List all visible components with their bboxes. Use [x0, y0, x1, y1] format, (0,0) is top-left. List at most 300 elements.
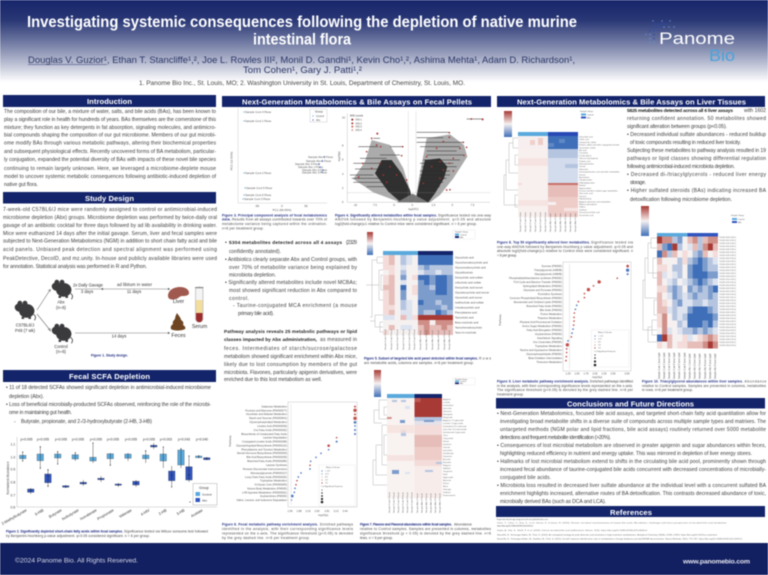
legend: sample group: Abx: [738, 221, 741, 224]
text block: fecal pathway analysis: classes impacted by Abx administration,: [224, 337, 318, 343]
text block: conclusions: detections and frequent metabolite identification (>20%).: [500, 435, 611, 441]
caption: figure 4: log2(fold-change)≥1 relative to Control mice were considered significant. n = 6 per group.: [335, 222, 477, 226]
pathway labels: Phenylalanine and Tyrosine Metabolism: [241, 448, 287, 452]
authors: Douglas V. Guzior¹, Ethan T. Stancliffe¹,², Joe L. Rowles III², Monil D. Gandhi¹, Kevin Cho¹,², Ashima Mehta¹, Adam D. Richardson¹,: [28, 55, 575, 65]
column labels: Sample Abx 5 Fecal: [434, 493, 437, 513]
legend: group: Control: [316, 115, 325, 118]
pathway labels: Sucrose (PW000): [542, 264, 562, 268]
outlier dots: [22, 442, 207, 502]
row labels: Tricin: [443, 435, 448, 437]
row labels: Rutin: [443, 473, 448, 476]
column labels: Sample Cont 5 Liver Lipid: [678, 352, 681, 379]
caption: figure 9: [497, 380, 634, 396]
text block: fecal pathway analysis: Pathway analysis reveals 25 metabolic pathways or lipid: [224, 329, 357, 335]
text block: conclusions: • Microbiota loss resulted in decreased liver sulfate abundance at the individual level with a concurrent sulfated BA: [497, 483, 767, 489]
row labels: Genistein: [443, 410, 451, 413]
significance labels: p=0.040: [196, 438, 208, 442]
column labels: Sample Cont 2 Fecal: [390, 329, 393, 350]
figure 5: bile acid heatmap: [366, 230, 489, 350]
row labels: TG(14:0/16:1/18:1): [719, 291, 736, 293]
text block: fecal pathway analysis: microbiota. Flavones, particularly apigenin derivatives, were: [224, 370, 357, 376]
pathway labels: Pentose Glucuronate Interconversions: [243, 467, 288, 471]
diagram labels: Abx: [57, 300, 66, 304]
legend: MSI levels: MSI-1: [356, 120, 363, 122]
caption: figure 6: identified in the analysis, with their corresponding significance levels: [222, 527, 353, 531]
row labels: Formononetin: [443, 494, 455, 497]
row labels: Myricetin: [443, 479, 451, 482]
caption: figure 10: [642, 380, 767, 392]
row labels: TG(18:1/18:1/18:2): [719, 243, 736, 245]
pathway labels: Long Chain Fatty Acids (PW000292): [245, 475, 287, 479]
diagram labels: [15, 282, 207, 354]
pathway labels: Glycerophospholipids (PW000): [526, 352, 562, 356]
row labels: TG(18:0/18:1/18:1): [719, 252, 736, 254]
row labels: Isorhamnetin 3-glucoside: [443, 431, 466, 434]
row labels: Hyperoside: [443, 477, 454, 479]
column labels: Sample Cont 5 Fecal: [408, 329, 411, 350]
legend: MSI levels: MSI-4: [356, 130, 363, 132]
pathway labels: Ketone Body Metabolism (PW000): [247, 486, 287, 490]
figure 9: liver pathway enrichment: 2.00: [592, 372, 598, 376]
caption: figure 4: Significance tested via one-way: [438, 214, 491, 218]
row labels: Glucose 6-phosphate: [579, 157, 599, 160]
text block: fecal findings: (2329: [346, 240, 357, 246]
legend: sample group: Sample Group: [731, 215, 745, 217]
text block: references: https://doi.org/10.1186/s40168-020-00000-0: [497, 524, 534, 528]
text block: conclusions: • Next-Generation Metabolomics, focused bile acid assays, and targeted short-chain fatty acid quantitation allow for: [497, 411, 766, 417]
caption: figure 9: The significance threshold (p<0.05) is denoted by the grey dashed line. n=6 per: [497, 388, 634, 392]
x axis labels: Butyrate: [48, 508, 62, 519]
row labels: TG(18:2/20:4/22:6): [719, 345, 736, 347]
row labels: Inosine: [579, 174, 586, 176]
row labels: Phenylalanine acid: [455, 310, 477, 314]
significance labels: p<0.005: [72, 438, 84, 442]
row labels: Quercetin: [443, 407, 452, 410]
text block: SCFA findings: ome in maintaining gut health.: [9, 410, 72, 416]
row labels: Apigenin: [443, 398, 451, 401]
text block: SCFA findings: -: [14, 419, 16, 425]
column labels: Sample Cont 2 Liver Lipid: [663, 352, 666, 379]
column labels: Sample Cont 6 Liver Lipid: [684, 352, 686, 379]
pathway labels: Diacylglycerols (HMDB): [535, 272, 562, 276]
text block: fecal pathway analysis: feces. Intermediates of starch/sucrose/galactose: [224, 346, 357, 352]
text block: fecal findings: 5304 metabolites detected across all 4 assays: [229, 240, 342, 246]
figure 4: volcano plot: 10: [342, 115, 345, 119]
column labels: Sample Cont 4 Liver Lipid: [673, 352, 676, 379]
enrichment points: [565, 265, 629, 361]
text block: study design: gavage of an antibiotic cocktail for three days followed by ad lib availability in drinking water.: [3, 223, 217, 229]
icon: parent mouse: [15, 301, 36, 320]
legend: MSI levels: MSI-2: [356, 123, 363, 125]
row labels: TG(16:1/18:1/18:2): [719, 255, 736, 257]
legend: group: [310, 109, 327, 122]
text block: study design: acid panels. Unbiased peak detection and spectral alignment was performed using: [3, 247, 217, 253]
authors: [28, 55, 575, 75]
text block: conclusions: • Hallmarks of lost microbial metabolism extend to shifts in the circulating bile acid pool, prominently shown through: [497, 459, 766, 465]
text block: fecal findings: microbiota depletion.: [229, 272, 276, 278]
pathway labels: N-Glycan Core (PW000283): [255, 483, 287, 487]
pathway labels: Glycolysis and Pyruvate (PW000): [523, 288, 562, 292]
row labels: Deoxycholic sulfate: [579, 141, 597, 144]
column labels: Sample Cont 1 Liver: [519, 212, 522, 232]
text block: liver findings: Subjecting these metabolites to pathway analysis resulted in 19: [627, 148, 766, 154]
figure 6: fecal pathway enrichment: 3.13: [333, 509, 339, 513]
diagram labels: Feces: [171, 333, 186, 339]
row labels: Ribose 5-phosphate: [579, 203, 598, 206]
row labels: Wogonin: [443, 465, 451, 467]
caption: figure 3: Figure 3. Principal component analysis of fecal metabolomics: [222, 214, 327, 218]
pathway labels: Bile Acids (PW000): [540, 308, 562, 312]
control boxes: [20, 450, 202, 465]
row labels: Beta-muricholic acid: [455, 320, 479, 324]
text block: liver findings: significant alteration between groups (p<0.05).: [627, 124, 727, 130]
antibiotic boxes: [28, 445, 210, 492]
row labels: TG(14:0/16:0/18:1): [719, 246, 736, 248]
figure 6: fecal pathway enrichment: 2.50: [314, 509, 320, 513]
title: intestinal flora: [253, 32, 351, 48]
text block: conclusions: increased fecal abundance of taurine-conjugated bile acids concurrent with decreased concentrations of microbially-: [500, 467, 766, 473]
figure 4: volcano plot: 0: [342, 200, 344, 204]
row labels: Betaine: [579, 184, 587, 187]
figure 6: fecal pathway enrichment: 2.81: [324, 509, 330, 513]
row labels: Estrone sulfate and other conjugated steroids: [579, 144, 619, 147]
label leaders: [350, 119, 483, 187]
text block: liver findings: detoxification following microbiome depletion.: [630, 197, 732, 203]
caption: figure 5: are metabolite acids, columns are samples. n=6 per treatment group.: [364, 361, 474, 365]
legend: enrichment: 1.5: [325, 483, 329, 485]
icon: feces: [171, 313, 185, 330]
figure 9: liver pathway enrichment: -log10(p): [592, 375, 602, 379]
column labels: Sample Cont 2 Fecal: [392, 492, 396, 513]
text block: SCFA findings: Butyrate, propionate, and 2-/3-hydroxybutyrate (2-HB, 3-HB): [21, 419, 152, 425]
figure 4: volcano plot: -5: [393, 203, 396, 207]
heading: fecal metabolomics: Next-Generation Metabolomics & Bile Assays on Fecal Pellets: [242, 98, 472, 106]
column labels: Sample Abx 6 Liver: [574, 213, 577, 232]
row labels: Galangin: [443, 489, 451, 491]
legend: enrichment: 1.0: [325, 480, 329, 482]
caption: figure 7: significance threshold (p < 0.05) is denoted by the grey dashed line. n=6: [360, 532, 491, 536]
pathway labels: Threonine Metabolism: [536, 360, 562, 364]
column labels: [384, 329, 451, 350]
figure 4: volcano plot: 5: [452, 203, 454, 207]
row labels: TG(16:1/16:1/18:1): [719, 279, 736, 281]
figure 3: PCA plot: Sample Abx 1 Fbow: [298, 165, 324, 169]
pathway labels: Glycosphingolipid Biosynthesis (PW000122): [236, 444, 287, 448]
legend: enrichment: 0.5: [325, 477, 329, 479]
figure 3: PCA plot: [230, 108, 334, 212]
caption: figure 3: data.: [222, 218, 231, 222]
caption: figure 2: by Benjamini-Hochberg p-value adjustment. q<0.05 considered significant. n = 6 per group.: [6, 534, 150, 538]
pathway labels: Phytanic Acid Peroxisomal Oxidation: [520, 320, 563, 324]
pathway labels: Lactose Degradation: [263, 436, 288, 440]
figure 9: liver pathway enrichment: 2.50: [610, 372, 616, 376]
caption: figure 7: [360, 522, 491, 540]
column labels: Sample Abx 4 Fecal: [437, 330, 440, 350]
column labels: Sample Abx 1 Fecal: [416, 493, 419, 513]
x axis labels: Isobutyrate: [61, 508, 80, 521]
row labels: Deoxycholic acid sulfate: [455, 276, 483, 280]
pathway labels: Pyrimidine Synthesis: [538, 292, 563, 296]
significance labels: p<0.005: [55, 438, 67, 442]
row labels: Lithocholic acid: [579, 136, 593, 138]
column labels: Sample Cont 3 Fecal: [397, 492, 400, 513]
row labels: Cholic acid: [579, 139, 589, 141]
pathway labels: Beta-Oxidation Intermediates: [528, 356, 563, 360]
row labels: [579, 136, 620, 217]
column labels: Sample Cont 3 Liver: [529, 212, 532, 232]
caption: figure 9: Enriched pathways identified: [590, 380, 633, 384]
pathway labels: Oxo Ceramides (PW000): [533, 340, 562, 344]
affiliations: 1. Panome Bio Inc., St. Louis, MO; 2. Washington University in St. Louis, Department of Chemistry, St. Louis, MO.: [139, 81, 465, 87]
significance labels: p<0.005: [143, 438, 155, 442]
text block: SCFA findings: • Loss of beneficial microbially-producted SCFAs observed, reinforcing the role of the microbi-: [6, 402, 211, 408]
panel: liver metabolomics: [497, 96, 767, 396]
x axis labels: [1, 508, 203, 526]
row labels: Tauro-b-muricholic: [455, 330, 477, 334]
legend: enrichment: -0.5: [598, 339, 602, 341]
column labels: Sample Abx 6 Fecal: [438, 493, 442, 513]
column labels: Sample Abx 3 Fecal: [425, 493, 428, 513]
heading: introduction: Introduction: [87, 97, 132, 106]
row labels: TG(18:2/18:2/20:4): [719, 318, 736, 320]
x axis labels: Acetate: [190, 508, 204, 518]
column labels: [658, 352, 717, 379]
row labels: Nobiletin: [443, 467, 451, 470]
legend: group: Group: [199, 486, 209, 490]
column labels: Sample Abx 2 Fecal: [425, 330, 428, 350]
significance labels: p<0.005: [90, 438, 102, 442]
diagram labels: 14 days: [112, 334, 126, 338]
figure 3: PCA plot: Sample Abx 3 Fbow: [302, 170, 328, 174]
figure 7: flavone heatmap: [373, 370, 475, 513]
row labels: Taurocholic acid: [579, 215, 593, 217]
caption: figure 2: [6, 530, 208, 538]
row labels: TG(16:0/18:1/22:6): [719, 267, 736, 269]
text block: introduction: bial compounds shaping the composition of our gut microbiome. Members of our gut microbi-: [4, 132, 216, 138]
figure 4: volcano plot: 0: [412, 203, 414, 207]
pathway labels: Monoacylglycerols (PW000117): [251, 471, 287, 475]
text block: conclusions: highlighting reduced efficiency in nutrient and energy uptake. This was mirrored in depletion of liver energy stores.: [500, 451, 752, 457]
text block: study design: [3, 207, 217, 270]
row labels: [443, 398, 468, 497]
text block: study design: PeakDetective, DecoID, and mz.unity. In-house and publicly available libraries were used: [3, 256, 217, 262]
figure 6: fecal pathway enrichment: 1.88: [296, 509, 302, 513]
caption: figure 6: Figure 6. Fecal metabolic pathway enrichment analysis.: [222, 522, 318, 526]
row labels: Ursodeoxycholic acid: [455, 306, 480, 310]
icon: antibiotic mouse: [52, 280, 73, 299]
diagram labels: (n=6): [56, 349, 67, 354]
row labels: Palmitic acid: [579, 160, 590, 163]
pathway labels: Linoleic Acid (PW000069): [257, 424, 287, 428]
column labels: Sample Cont 1 Fecal: [388, 492, 391, 513]
caption: figure 3: n=6 per treatment group.: [222, 226, 264, 230]
legend: MSI levels: MSI Levels: [350, 113, 364, 117]
pathway labels: Glycerophospholipid Metabolism: [250, 420, 287, 424]
caption: figure 6: [222, 522, 353, 540]
text block: fecal findings: - Taurine-conjugated MCA enrichment (a mouse: [233, 303, 357, 309]
heat body: [387, 398, 442, 498]
icon: control mouse: [52, 324, 73, 343]
caption: figure 8: = 6 per group.: [497, 254, 517, 258]
legend: enrichment: Mean Z-Score: [326, 466, 341, 469]
row labels: TG(18:0/16:0/18:2): [719, 330, 736, 332]
significance labels: p=0.043: [178, 438, 190, 442]
x axis labels: 2-Methylbutyrate: [1, 508, 28, 526]
caption: figure 9: treatment group.: [497, 392, 524, 396]
row labels: Glycocholic acid: [455, 256, 474, 260]
pathway labels: Oxo Fatty Acids (PW000292): [254, 428, 287, 432]
row labels: TG(18:1/18:2/20:4): [719, 294, 736, 296]
panel: study design: [3, 192, 217, 358]
figure 6: fecal pathway enrichment: 2.19: [305, 509, 311, 513]
text block: SCFA findings: [6, 385, 211, 425]
caption: figure 10: in rows. n=6 per treatment group.: [642, 388, 693, 392]
caption: figure 2: Significance tested via Wilcox sonsums test followed: [124, 530, 208, 534]
caption: figure 10: Abundance: [744, 380, 767, 384]
row labels: [719, 237, 736, 347]
diagram labels: P49 (7 wk): [15, 328, 36, 333]
significance labels: [20, 438, 208, 442]
row labels: Luteolin 7-O-glucoside: [443, 422, 464, 425]
row labels: Naringenin: [443, 414, 453, 416]
figure 4: volcano plot: [337, 112, 490, 211]
y axis: Normalized Abundance: [6, 461, 10, 494]
legend: sample group: [731, 215, 745, 224]
caption: figure 4: Figure 4. Significantly altered metabolites within fecal samples.: [335, 214, 437, 218]
pathway labels: Phosphatidylethanolamine synthesis (PW000): [509, 276, 562, 280]
color key: [504, 111, 512, 137]
text block: references: Gupta, A., Kim, S., Smith, P. et al. (2023). Diverse microbial bile acid modifications. Nature, 15(9), https://doi.org/10.1038/s41586-023-00000-0: [497, 529, 648, 532]
figure 6: fecal pathway enrichment: -log10(p): [318, 513, 328, 517]
legend: group: Control: [202, 492, 212, 496]
text block: study design: microbiome depletion (Abx) groups. Microbiome depletion was performed by twice-daily oral: [3, 215, 217, 221]
text block: liver findings: with 1602: [744, 108, 766, 114]
heading: references: References: [610, 508, 652, 517]
caption: figure 6: by the grey dashed line. n=6 per treatment group.: [222, 536, 310, 540]
figure 3: PCA plot: PC1 (69.65%): [273, 208, 291, 212]
legend: enrichment: -0.5: [325, 474, 329, 476]
row labels: Oleoylcarnitine: [579, 179, 593, 182]
heat body: [518, 136, 548, 217]
caption: figure 8: Figure 8. Top 50 significantly altered liver metabolites.: [497, 240, 590, 244]
significance labels: p<0.005: [37, 438, 49, 442]
heading: fecal SCFA depletion: Fecal SCFA Depletion: [69, 372, 150, 381]
column labels: Sample Abx 4 Fecal: [430, 493, 432, 513]
column labels: Sample Abx 6 Liver Lipid: [714, 353, 717, 379]
column labels: Sample Cont 6 Liver: [544, 212, 547, 232]
legend: enrichment: # of Significant Features: [321, 485, 343, 488]
heading: study design: Study Design: [85, 194, 134, 203]
row labels: Lithocholic acid sulfate: [455, 280, 482, 284]
pathway labels: Lactose Synthesis: [266, 463, 288, 467]
column labels: Sample Abx 2 Liver: [554, 213, 557, 232]
row labels: TG(18:1/18:2/18:2): [719, 261, 736, 263]
row labels: TG(16:0/18:1/18:2): [719, 237, 736, 239]
figure 4: volcano plot: 4: [342, 172, 344, 176]
column labels: Sample Abx 1 Liver Lipid: [688, 353, 692, 379]
row labels: TG(16:0/20:4/18:2): [719, 285, 736, 287]
pathway labels: Sphingolipid Metabolism (PW000): [523, 284, 562, 288]
caption: figure 5: Rows: [479, 356, 491, 360]
row labels: TG(18:2/18:2/18:2): [719, 273, 736, 275]
color key: [367, 232, 373, 255]
row labels: Glycochenodeoxycholic acid: [455, 260, 488, 264]
caption: figure 3: [222, 214, 327, 230]
row labels: TG(18:1/18:1/22:6): [719, 303, 736, 305]
color key: [641, 206, 649, 236]
heading: conclusions: Conclusions and Future Directions: [567, 399, 694, 408]
arrows: [37, 288, 170, 334]
panel: introduction: [3, 95, 217, 188]
legend: sample group: [453, 378, 475, 385]
row labels: Glucuronic acid: [579, 193, 593, 195]
row labels: Isolithocholic acid sulfate: [455, 300, 484, 304]
figure 6: fecal pathway enrichment: Pathway: [228, 435, 232, 447]
authors: Tom Cohen¹, Gary J. Patti¹,²: [243, 65, 362, 75]
x axis labels: 3-HIB: [34, 508, 45, 517]
text block: fecal findings: control.: [229, 296, 249, 302]
logo: Bio: [709, 46, 735, 65]
text block: references: Experimental design diagram built using BioRender.com: [497, 518, 548, 521]
figure 6: fecal pathway enrichment: [228, 402, 357, 517]
diagram labels: ad libitum in water: [117, 282, 153, 287]
figure 3: PCA plot: Sample Abx 2 Fbow: [306, 159, 332, 163]
row labels: Acacetin: [443, 458, 451, 461]
caption: figure 8: Significance tested via: [591, 240, 633, 244]
pathway labels: Starch and Sucrose (PW000941): [249, 416, 287, 420]
figure 4: volcano plot: -7.5: [372, 203, 377, 207]
figure 3: PCA plot: PC2 (12.83%): [230, 152, 234, 170]
legend: enrichment: 0.5: [598, 342, 602, 344]
legend: enrichment: < -1.0: [598, 335, 604, 338]
header band: [0, 0, 768, 87]
row labels: Deoxycholic acid isomer: [455, 286, 483, 290]
row labels: Glutamine: [579, 168, 589, 171]
row labels: TG(16:1/18:2/18:2): [719, 306, 736, 308]
pathway labels: [236, 404, 288, 502]
figure 4: volcano plot: 7.5: [471, 203, 475, 207]
column labels: Sample Abx 6 Fecal: [448, 330, 451, 350]
diagram labels: 2x Daily Gavage: [73, 282, 104, 288]
text block: introduction: The composition of our bile, a mixture of water, salts, and bile acids (BAs), has been known to: [4, 109, 216, 115]
heat cells: [657, 236, 718, 348]
row labels: Uridine: [579, 207, 586, 209]
caption: figure 7: Abundance: [454, 522, 472, 526]
column labels: Sample Abx 1 Fecal: [419, 330, 422, 350]
pathway labels: Arachidonic Signaling: [537, 336, 563, 340]
row labels: TG(14:0/18:1/18:2): [719, 270, 736, 272]
row labels: TG(16:0/16:0/18:1): [719, 264, 736, 266]
figure 4: volcano plot: 2: [342, 186, 344, 190]
text block: fecal findings: most showed significant reduction in Abx compared to: [229, 288, 357, 294]
figure 4: volcano plot: -10: [353, 203, 358, 207]
text block: conclusions: [497, 411, 767, 505]
footer band: [0, 543, 768, 575]
legend: enrichment: [592, 330, 629, 367]
pathway labels: Steroid Hormone Biosynthesis (PW000060): [237, 451, 287, 455]
row labels: PE(18:0/20:4): [579, 199, 592, 201]
pathway labels: Acylcarnitines (PW000): [260, 494, 287, 498]
row labels: TG(18:0/18:1/20:4): [719, 309, 736, 311]
row labels: TG(18:1/20:4/20:4): [719, 324, 736, 326]
icon: serum tube: [195, 287, 204, 322]
row labels: TG(16:0/22:6/18:1): [719, 342, 736, 344]
whiskers: [23, 443, 207, 494]
caption: figure 6: represented on the x-axis. The significance threshold (p<0.05) is denoted: [222, 532, 353, 536]
row labels: Fisetin: [443, 482, 449, 485]
legend: MSI levels: MSI-3: [356, 127, 363, 129]
text block: introduction: and subsequent physiological effects. Recently uncovered forms of BA metabolism, particular-: [4, 149, 216, 155]
